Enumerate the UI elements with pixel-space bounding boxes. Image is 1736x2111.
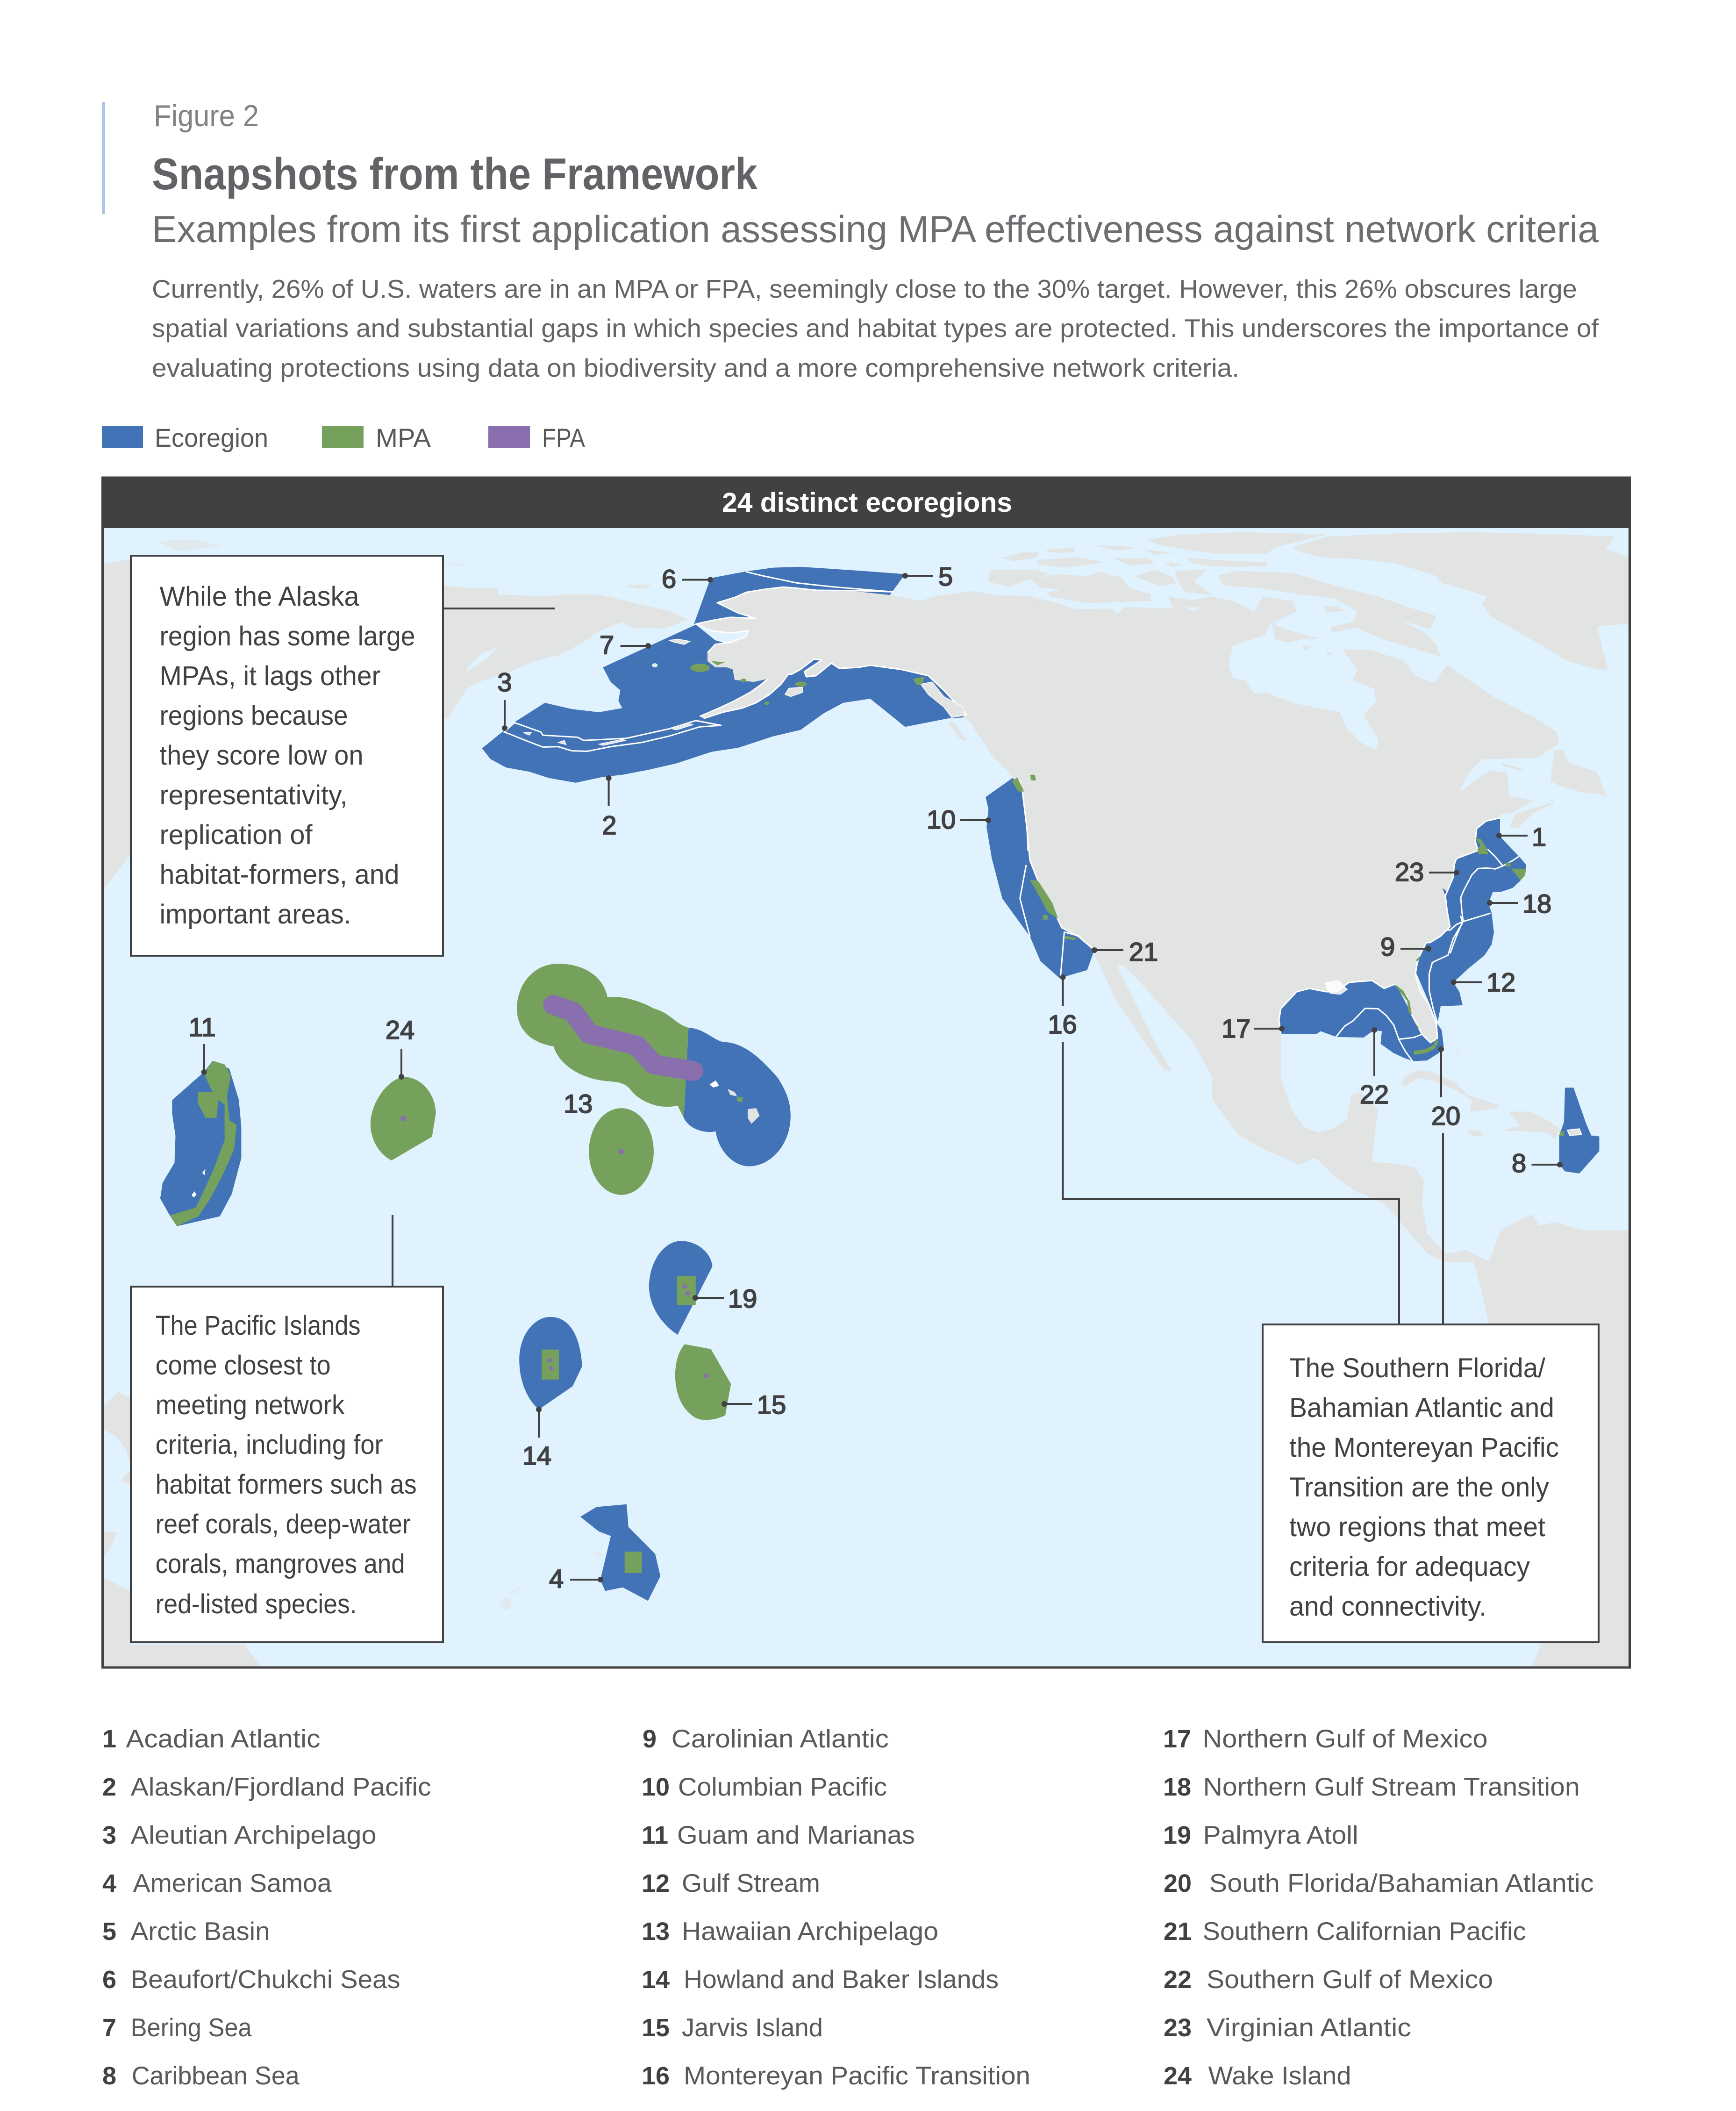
callout: Pacific Islands bbox=[131, 1287, 443, 1642]
label 8 bbox=[1512, 1148, 1563, 1178]
callout: Pacific Islands: corals, mangroves and bbox=[156, 1549, 405, 1579]
callout: Pacific Islands: red-listed species. bbox=[156, 1589, 357, 1619]
callout: Alaska: habitat-formers, and bbox=[160, 859, 399, 890]
ocean background bbox=[102, 527, 1630, 1667]
ecoregion list: column 1: Alaskan/Fjordland Pacific bbox=[131, 1772, 431, 1801]
label 15: 15 bbox=[757, 1390, 786, 1419]
ecoregion list: column 3: 23 bbox=[1164, 2014, 1192, 2042]
ecoregions: Atlantic bbox=[1416, 818, 1526, 1024]
label 20 bbox=[1431, 1046, 1460, 1131]
callout: Alaska: MPAs, it lags other bbox=[160, 661, 380, 691]
label 2: 2 bbox=[602, 810, 617, 840]
label 7 bbox=[600, 630, 651, 659]
Palmyra Atoll bbox=[649, 1241, 712, 1335]
Guam and Marianas bbox=[160, 1061, 241, 1226]
ecoregion list: column 1: Acadian Atlantic bbox=[126, 1724, 320, 1753]
connector: Alaska callout bbox=[443, 608, 555, 609]
ecoregion list: column 1: 3 bbox=[102, 1821, 116, 1849]
American Samoa bbox=[580, 1504, 660, 1601]
label 4: 4 bbox=[549, 1564, 564, 1593]
ecoregion list: column 3: Virginian Atlantic bbox=[1207, 2013, 1411, 2042]
ecoregion list: column 1: 5 bbox=[102, 1918, 116, 1946]
ecoregion list: column 3: 21 bbox=[1164, 1918, 1192, 1946]
label 11: 11 bbox=[189, 1012, 216, 1042]
label 14 bbox=[522, 1407, 551, 1470]
callout: South Florida and Monterey: Transition are the only bbox=[1289, 1472, 1549, 1503]
ecoregion list: column 2: Columbian Pacific bbox=[678, 1772, 887, 1801]
MPAs: Florida bbox=[1395, 954, 1439, 1055]
Hawaiian Archipelago bbox=[517, 964, 791, 1195]
label 6: 6 bbox=[662, 564, 676, 594]
label 5: 5 bbox=[938, 562, 953, 591]
ecoregion list: column 2: Carolinian Atlantic bbox=[672, 1724, 889, 1753]
ecoregion list: column 1: Bering Sea bbox=[131, 2013, 252, 2042]
coast outlines and ecoregion boundaries bbox=[504, 572, 1519, 1061]
map header bar: 24 distinct ecoregions bbox=[722, 487, 1012, 518]
map labels bbox=[189, 562, 1563, 1593]
ecoregion list: column 2: Gulf Stream bbox=[682, 1868, 820, 1897]
subtitle: Examples from its first application assessing MPA effectiveness against network criteria bbox=[152, 208, 1599, 250]
land: Russia, Asia, Arctic, Caribbean, South America bbox=[103, 532, 1631, 1668]
ecoregion list: column 1: 2 bbox=[102, 1773, 116, 1801]
ecoregion list: column 2: 9 bbox=[643, 1725, 657, 1753]
ecoregion list: column 1: 6 bbox=[102, 1966, 116, 1994]
callout: Alaska: regions because bbox=[160, 701, 348, 731]
ecoregion list: column 1 bbox=[102, 1724, 431, 2090]
callout: South Florida and Monterey: criteria for adequacy bbox=[1289, 1552, 1530, 1582]
ecoregion list: column 1: Beaufort/Chukchi Seas bbox=[131, 1965, 400, 1994]
label 17 bbox=[1222, 1014, 1285, 1043]
ecoregion list: column 3: Palmyra Atoll bbox=[1203, 1820, 1358, 1849]
ecoregion list: column 2: 14 bbox=[642, 1966, 670, 1994]
ecoregion list: column 1: American Samoa bbox=[133, 1868, 332, 1897]
label 18: 18 bbox=[1522, 889, 1551, 918]
callout: Pacific Islands: meeting network bbox=[156, 1390, 345, 1420]
figure label: Figure 2 bbox=[154, 99, 259, 133]
ecoregion list: column 2: 15 bbox=[642, 2014, 670, 2042]
label 3: 3 bbox=[497, 667, 512, 697]
small islands bbox=[523, 639, 965, 745]
legend: MPA bbox=[376, 423, 431, 452]
ecoregions: Gulf of Mexico bbox=[1279, 978, 1444, 1061]
label 19 bbox=[693, 1284, 757, 1313]
ecoregions: West Coast bbox=[986, 778, 1094, 978]
ecoregion list: column 2: Howland and Baker Islands bbox=[684, 1965, 999, 1994]
ecoregion list: column 2: 12 bbox=[642, 1869, 670, 1897]
Wake Island bbox=[371, 1077, 436, 1160]
ecoregion list: column 3: 22 bbox=[1164, 1966, 1192, 1994]
callout: Alaska: important areas. bbox=[160, 899, 351, 930]
label 4 bbox=[549, 1564, 603, 1593]
label 17: 17 bbox=[1222, 1014, 1250, 1043]
label 24: 24 bbox=[386, 1015, 414, 1045]
connector: South Florida to callout bbox=[1442, 1133, 1444, 1324]
ecoregion list: column 3: Northern Gulf Stream Transition bbox=[1203, 1772, 1580, 1801]
ecoregion list: column 1: Caribbean Sea bbox=[132, 2061, 300, 2090]
label 22: 22 bbox=[1360, 1080, 1389, 1109]
Caribbean Sea ecoregion bbox=[1559, 1088, 1599, 1174]
label 10 bbox=[927, 805, 991, 834]
ecoregion list: column 3: Southern Californian Pacific bbox=[1203, 1917, 1526, 1946]
intro text bbox=[152, 274, 1599, 382]
ecoregion list: column 1: 8 bbox=[102, 2062, 116, 2090]
label 18 bbox=[1487, 889, 1551, 918]
legend bbox=[102, 423, 586, 452]
ecoregion list: column 3: 20 bbox=[1164, 1869, 1192, 1897]
label 9 bbox=[1380, 932, 1431, 961]
MPAs: Alaska bbox=[691, 661, 1036, 792]
Pacific Islands ecoregions bbox=[160, 964, 791, 1601]
callout: Pacific Islands: habitat formers such as bbox=[156, 1469, 417, 1500]
label 22 bbox=[1360, 1027, 1389, 1109]
intro text: Currently, 26% of U.S. waters are in an MPA or FPA, seemingly close to the 30% target. However, this 26% obscures large bbox=[152, 274, 1577, 303]
map panel bbox=[102, 477, 1631, 2090]
callout: Pacific Islands: The Pacific Islands bbox=[156, 1310, 361, 1341]
callout: Alaska: While the Alaska bbox=[160, 581, 359, 612]
label 10: 10 bbox=[927, 805, 956, 834]
label 19: 19 bbox=[728, 1284, 757, 1313]
label 13: 13 bbox=[564, 1089, 593, 1118]
ecoregion list: column 2: 16 bbox=[642, 2062, 670, 2090]
callout: South Florida and Monterey: The Southern Florida/ bbox=[1289, 1353, 1546, 1383]
ecoregion list: column 2: 11 bbox=[642, 1821, 668, 1849]
callout: South Florida and Monterey: Bahamian Atlantic and bbox=[1289, 1393, 1554, 1423]
callout: Pacific Islands: reef corals, deep-water bbox=[156, 1509, 411, 1539]
MPAs: West Coast bbox=[1030, 880, 1076, 940]
title: Snapshots from the Framework bbox=[152, 149, 758, 199]
label 1 bbox=[1496, 822, 1546, 852]
label 23: 23 bbox=[1395, 857, 1424, 887]
ecoregion list: column 1: 7 bbox=[102, 2014, 116, 2042]
callout: South Florida and Monterey: and connectivity. bbox=[1289, 1591, 1486, 1622]
label 1: 1 bbox=[1532, 822, 1546, 852]
callout: Alaska: they score low on bbox=[160, 740, 364, 771]
land: North America mainland and Alaska bbox=[696, 587, 1559, 1262]
connector: Monterey to callout bbox=[1063, 1042, 1399, 1324]
legend: Ecoregion bbox=[155, 423, 268, 452]
MPAs: East Coast bbox=[1475, 838, 1526, 880]
label 24 bbox=[386, 1015, 414, 1080]
South America bbox=[1466, 1214, 1630, 1668]
connector: Pacific callout bbox=[392, 1215, 393, 1287]
ecoregion list: column 3: South Florida/Bahamian Atlantic bbox=[1209, 1868, 1594, 1897]
callout: South Florida and Monterey bbox=[1263, 1324, 1599, 1642]
ecoregion list: column 3 bbox=[1163, 1724, 1594, 2090]
ecoregion list: column 3: Northern Gulf of Mexico bbox=[1203, 1724, 1488, 1753]
ecoregion list: column 3: Wake Island bbox=[1208, 2061, 1351, 2090]
label 20: 20 bbox=[1431, 1101, 1460, 1131]
ecoregion list: column 1: 4 bbox=[102, 1869, 116, 1897]
Cuba, Hispaniola, Jamaica bbox=[1401, 1047, 1559, 1140]
Jarvis Island bbox=[675, 1344, 731, 1420]
intro text: spatial variations and substantial gaps in which species and habitat types are protected. This underscores the importance of bbox=[152, 314, 1599, 343]
label 2 bbox=[602, 775, 617, 840]
ecoregion list: column 3: 18 bbox=[1163, 1773, 1191, 1801]
callout: Alaska bbox=[131, 556, 443, 956]
ecoregion list: column 2: Hawaiian Archipelago bbox=[682, 1917, 938, 1946]
label 21: 21 bbox=[1129, 937, 1158, 966]
callout: Alaska: representativity, bbox=[160, 780, 348, 810]
label 14: 14 bbox=[522, 1441, 551, 1470]
ecoregion list: column 2: Montereyan Pacific Transition bbox=[684, 2061, 1030, 2090]
callout: South Florida and Monterey: the Montereyan Pacific bbox=[1289, 1432, 1559, 1463]
label 12 bbox=[1451, 967, 1515, 997]
ecoregion list: column 2: 10 bbox=[642, 1773, 670, 1801]
label 23 bbox=[1395, 857, 1459, 887]
ecoregion list: column 3: Southern Gulf of Mexico bbox=[1207, 1965, 1493, 1994]
ecoregion list: column 1: Arctic Basin bbox=[131, 1917, 270, 1946]
ecoregion list: column 2: Jarvis Island bbox=[682, 2013, 823, 2042]
ecoregion list: column 3: 17 bbox=[1163, 1725, 1191, 1753]
ecoregion list: column 3: 24 bbox=[1164, 2062, 1192, 2090]
callout: Alaska: replication of bbox=[160, 820, 313, 850]
callout: Alaska: region has some large bbox=[160, 621, 415, 651]
label 7: 7 bbox=[600, 630, 614, 659]
Arctic islands, Greenland, Newfoundland bbox=[988, 532, 1631, 828]
callout: Pacific Islands: criteria, including for bbox=[156, 1430, 383, 1460]
ecoregion list: column 2: 13 bbox=[642, 1918, 670, 1946]
Howland and Baker Islands bbox=[519, 1317, 582, 1410]
label 12: 12 bbox=[1486, 967, 1515, 997]
label 9: 9 bbox=[1380, 932, 1395, 961]
ecoregion list: column 2 bbox=[642, 1724, 1030, 2090]
label 11 bbox=[189, 1012, 216, 1075]
ecoregions: Alaska bbox=[482, 567, 971, 783]
callout: Pacific Islands: come closest to bbox=[156, 1350, 331, 1381]
map header bar bbox=[102, 477, 1630, 528]
label 21 bbox=[1092, 937, 1158, 966]
ecoregion list: column 1: Aleutian Archipelago bbox=[131, 1820, 377, 1849]
label 15 bbox=[722, 1390, 786, 1419]
label 8: 8 bbox=[1512, 1148, 1526, 1178]
map frame bbox=[103, 478, 1630, 1667]
label 5 bbox=[902, 562, 953, 591]
accent bar bbox=[102, 102, 105, 214]
label 3 bbox=[497, 667, 512, 731]
callout: South Florida and Monterey: two regions that meet bbox=[1289, 1512, 1545, 1542]
Chesapeake Bay bbox=[1442, 888, 1447, 895]
ecoregion list: column 3: 19 bbox=[1163, 1821, 1191, 1849]
label 16 bbox=[1048, 974, 1077, 1039]
map artwork bbox=[103, 532, 1631, 1668]
legend: FPA bbox=[542, 423, 586, 452]
label 16: 16 bbox=[1048, 1009, 1077, 1039]
intro text: evaluating protections using data on biodiversity and a more comprehensive network criteria. bbox=[152, 353, 1239, 382]
ecoregion list: column 1: 1 bbox=[102, 1725, 116, 1753]
label 6 bbox=[662, 564, 713, 594]
ecoregion list: column 2: Guam and Marianas bbox=[677, 1820, 915, 1849]
